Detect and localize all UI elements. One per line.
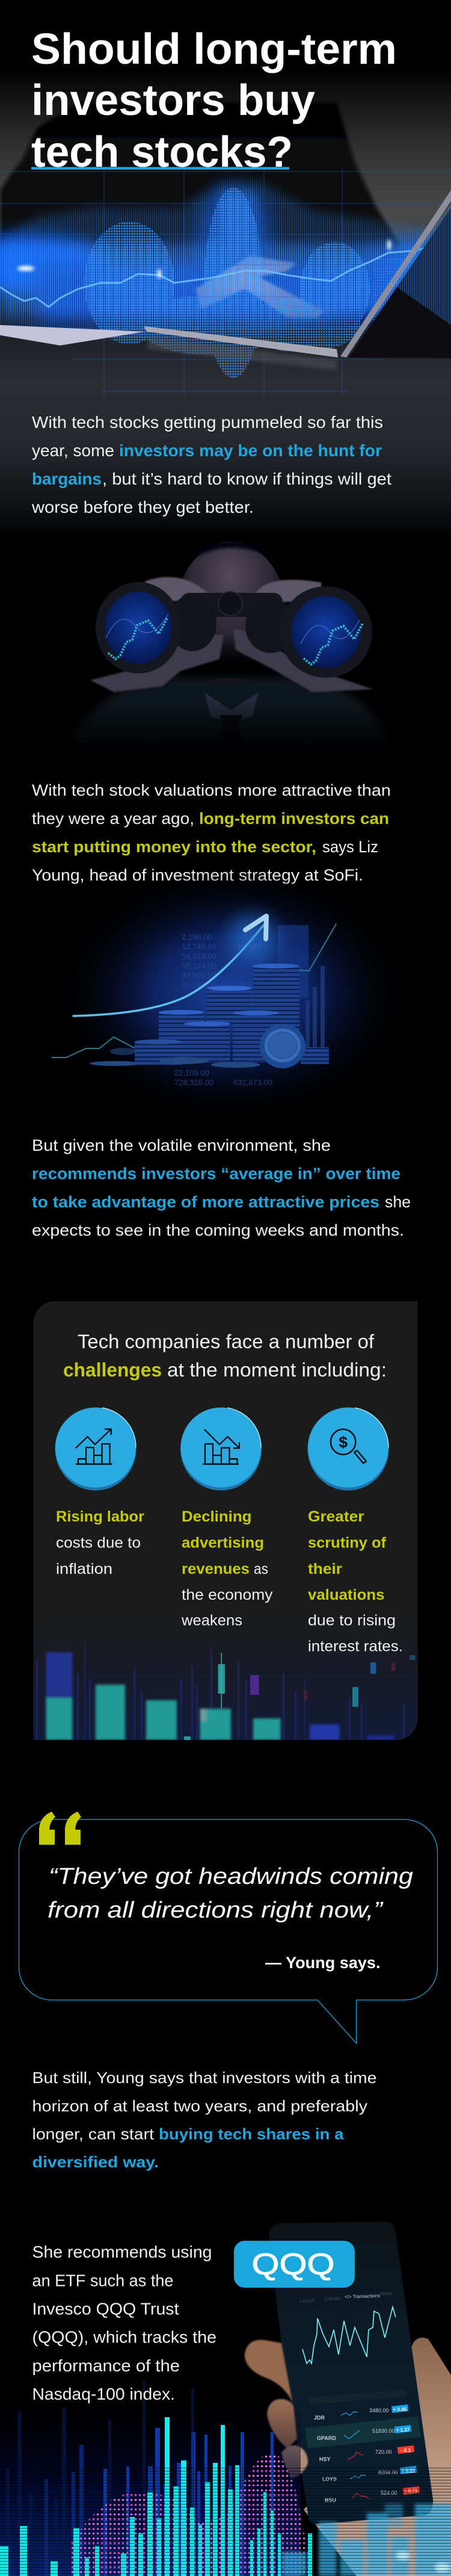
challenge: declining advertising revenues: revenues	[182, 1561, 250, 1577]
title line 3: tech stocks?	[31, 128, 293, 176]
icon: dollar magnifier	[308, 1407, 388, 1490]
hand on keyboard	[195, 256, 325, 318]
dim number table: 45,815	[238, 980, 262, 989]
intro paragraph: , but it’s hard to know if things will get	[102, 469, 391, 488]
laptop reflection	[147, 337, 337, 370]
paragraph: long-term investors: With tech stock valuations more attractive than	[32, 781, 391, 799]
paragraph: ETF recommendation: (QQQ), which tracks the	[32, 2328, 216, 2346]
row: LDYS	[322, 2466, 417, 2482]
phone body	[269, 2221, 433, 2524]
scan stripes	[0, 2468, 451, 2576]
dim number table: 54,213.00	[182, 952, 216, 961]
dim number table: 2,196.00	[182, 932, 212, 941]
laptop screen edge	[340, 190, 451, 358]
dim number table: 16,197	[238, 942, 262, 951]
phone price chart	[302, 2307, 396, 2364]
challenge: declining advertising revenues: weakens	[181, 1612, 242, 1629]
table surface	[0, 328, 451, 539]
blue scan over the screen side	[391, 205, 451, 325]
right lens	[280, 586, 372, 678]
row: HSY: 720.00	[375, 2449, 392, 2455]
challenge: declining advertising revenues: as	[254, 1561, 268, 1577]
arrow head	[245, 916, 266, 939]
binocular bridge	[180, 593, 283, 617]
wall backdrop	[0, 81, 451, 325]
challenge: rising labor costs: costs due to	[56, 1535, 141, 1552]
challenge: greater scrutiny of valuations: scrutiny of	[308, 1535, 387, 1552]
paragraph: diversified buying: longer, can start	[32, 2125, 155, 2143]
lower hands	[90, 629, 373, 692]
paragraph: ETF recommendation: Invesco QQQ Trust	[32, 2299, 179, 2318]
row: BSU: - 0.71	[405, 2488, 418, 2494]
dim number table: 632,673.00	[233, 1078, 272, 1087]
paragraph: long-term investors: long-term investors can	[199, 810, 389, 828]
dim number table: 55,124.00	[182, 961, 216, 970]
challenge: rising labor costs	[56, 1508, 144, 1577]
image: person looking through binoculars	[36, 541, 421, 749]
collar	[204, 692, 259, 722]
glow spots	[396, 2551, 450, 2572]
dim blue bars	[44, 2428, 274, 2576]
binocular barrels	[168, 595, 296, 653]
paragraph: average in: But given the volatile environment, she	[32, 1136, 331, 1154]
navy fog	[0, 2401, 301, 2576]
flat coins	[90, 1048, 260, 1068]
challenge: greater scrutiny of valuations	[308, 1508, 403, 1655]
row: JDR	[314, 2404, 408, 2421]
row: BSU	[325, 2486, 420, 2503]
light flares	[17, 240, 391, 279]
background chart column	[278, 925, 308, 997]
challenge: declining advertising revenues	[181, 1508, 273, 1629]
panel background	[34, 1301, 418, 1740]
suit	[0, 102, 403, 337]
challenge: greater scrutiny of valuations: their	[308, 1561, 342, 1577]
row: BSU: 524.00	[381, 2490, 397, 2496]
paragraph: long-term investors: they were a year ago,	[32, 810, 194, 828]
hand palm	[304, 2338, 451, 2576]
quote text: from all directions right now,”	[48, 1898, 384, 1923]
dim number table: 12,746.00	[182, 942, 216, 951]
paragraph: diversified buying: diversified way.	[32, 2153, 159, 2171]
blue fog	[0, 187, 451, 322]
challenge: greater scrutiny of valuations: due to rising	[308, 1612, 396, 1629]
challenge: greater scrutiny of valuations: Greater	[308, 1508, 364, 1525]
title	[31, 25, 397, 176]
row: GPARD: 51830.00	[372, 2428, 395, 2434]
shoulders and suit	[66, 677, 391, 746]
phone search bar	[308, 2389, 407, 2404]
top hands	[144, 577, 322, 602]
paragraph: long-term investors	[32, 781, 391, 884]
row: HSY: - 0.1	[401, 2448, 411, 2453]
dim number table: 728,328.00	[174, 1078, 213, 1087]
paragraph: long-term investors: says Liz	[322, 838, 378, 856]
icon: dollar magnifier: $	[339, 1433, 348, 1451]
side chart bars	[305, 966, 325, 1051]
blue glow backdrop	[57, 867, 406, 1119]
thin chart lines	[52, 924, 336, 1057]
paragraph: diversified buying: horizon of at least two years, and preferably	[32, 2097, 367, 2115]
icon: falling chart	[180, 1407, 262, 1490]
paragraph: average in: she	[385, 1193, 411, 1211]
challenge: declining advertising revenues: the economy	[182, 1587, 273, 1603]
row: HSY	[319, 2445, 414, 2462]
challenge: greater scrutiny of valuations: interest rates.	[308, 1638, 403, 1655]
head	[174, 542, 288, 698]
QQQ badge: QQQ	[251, 2247, 334, 2281]
overlay grid	[0, 169, 451, 397]
quote text: “They’ve got headwinds coming	[49, 1864, 413, 1889]
paper on table	[0, 325, 145, 345]
row: GPARD: + 1.37	[396, 2427, 410, 2433]
lower right glow bars	[283, 2504, 451, 2576]
QQQ badge	[234, 2241, 355, 2288]
mouth	[212, 678, 248, 684]
dim number table: 22,109.00	[174, 1068, 209, 1077]
quote callout	[19, 1812, 438, 2043]
hair	[186, 541, 280, 563]
row: GPARD: GPARD	[317, 2435, 336, 2441]
intro paragraph: investors may be on the hunt for	[119, 441, 382, 460]
fingers holding phone	[245, 2340, 308, 2478]
challenge: declining advertising revenues: Declining	[182, 1508, 251, 1525]
quote text	[48, 1864, 413, 1923]
row: JDR: JDR	[314, 2415, 325, 2421]
row: LDYS: LDYS	[322, 2476, 337, 2482]
vertical data lines	[0, 174, 438, 344]
row: HSY: HSY	[319, 2456, 331, 2462]
speech bubble outline	[19, 1819, 438, 2043]
title underline	[31, 167, 289, 170]
challenge: rising labor costs: inflation	[56, 1561, 112, 1577]
paragraph: diversified buying: But still, Young says that investors with a time	[32, 2069, 376, 2087]
bar chart overlay	[0, 2382, 451, 2576]
dim number table: 49,501.00	[182, 971, 216, 980]
paragraph: diversified buying: buying tech shares in a	[159, 2125, 344, 2143]
paragraph: average in: to take advantage of more attractive prices	[32, 1193, 379, 1211]
panel: challenges	[33, 1301, 418, 1740]
image: hand holding phone with market data	[245, 2221, 451, 2576]
paragraph: ETF recommendation: Nasdaq-100 index.	[32, 2385, 175, 2403]
quote attribution: — Young says.	[265, 1954, 380, 1972]
coin stacks	[135, 964, 329, 1065]
quotation mark icon	[39, 1812, 81, 1845]
rising arrow line	[73, 924, 265, 1016]
highlighted row	[305, 2417, 421, 2448]
title line 1: Should long-term	[31, 25, 397, 73]
paragraph: average in: expects to see in the coming weeks and months.	[32, 1221, 404, 1239]
paragraph: ETF recommendation: performance of the	[32, 2356, 180, 2375]
phone tabs: </> Transactions	[345, 2293, 380, 2300]
paragraph: average in	[32, 1136, 411, 1239]
arrow glow	[229, 915, 277, 963]
challenge: greater scrutiny of valuations: valuations	[308, 1587, 385, 1603]
phone tabs: News	[380, 2291, 392, 2297]
row: LDYS: + 0.21	[402, 2468, 416, 2474]
title line 2: investors buy	[31, 76, 315, 125]
phone tabs: Candle	[325, 2296, 340, 2302]
row: LDYS: 8204.00	[378, 2469, 398, 2475]
intro paragraph: With tech stocks getting pummeled so far this	[32, 413, 383, 432]
dim number table	[174, 932, 272, 1087]
row: JDR: + 0.45	[393, 2407, 407, 2412]
paragraph: long-term investors: start putting money into the sector,	[32, 838, 316, 856]
paragraph: ETF recommendation: an ETF such as the	[32, 2271, 173, 2290]
row: BSU: BSU	[325, 2497, 336, 2503]
dim number table: 21,246.00	[182, 980, 216, 989]
left lens	[96, 582, 181, 673]
candlestick bars	[34, 1643, 418, 1740]
row: GPARD	[317, 2425, 411, 2441]
intro paragraph: worse before they get better.	[31, 498, 254, 516]
row: JDR: 3480.00	[369, 2407, 389, 2413]
dotted data domes	[84, 188, 370, 378]
binocular focus knob	[218, 592, 242, 616]
challenge: declining advertising revenues: advertising	[182, 1535, 264, 1552]
stock line chart	[0, 247, 451, 307]
hero image: person at laptop with blue data overlay	[0, 0, 451, 539]
paragraph: average in: recommends investors “average in” over time	[32, 1165, 400, 1183]
icon: rising chart	[55, 1407, 136, 1490]
challenge: rising labor costs: Rising labor	[56, 1508, 144, 1525]
intro paragraph: year, some	[32, 441, 114, 460]
panel heading: Tech companies face a number of	[78, 1331, 374, 1352]
intro paragraph	[31, 413, 391, 516]
intro paragraph: bargains	[32, 469, 102, 488]
paragraph: ETF recommendation: She recommends using	[32, 2243, 212, 2261]
paragraph: ETF recommendation	[32, 2243, 216, 2403]
panel heading: challenges	[63, 1359, 162, 1381]
phone tabs: Layout	[299, 2298, 314, 2303]
laptop shadow	[349, 208, 451, 358]
horizontal scan lines right	[373, 259, 416, 323]
pink dotted dome	[71, 2453, 311, 2576]
paragraph: long-term investors: Young, head of investment strategy at SoFi.	[32, 866, 363, 884]
image: coin stacks with rising arrow	[52, 867, 406, 1119]
bottom fade	[36, 701, 421, 749]
cyan bars	[0, 2417, 312, 2576]
standing coin	[260, 1024, 305, 1068]
panel heading: at the moment including:	[167, 1359, 387, 1381]
tie	[216, 715, 247, 743]
paragraph: diversified buying	[32, 2069, 376, 2171]
dim number table: 35,901	[238, 990, 262, 999]
laptop base	[144, 326, 338, 358]
panel heading	[63, 1331, 387, 1381]
phone tabs	[299, 2291, 392, 2303]
